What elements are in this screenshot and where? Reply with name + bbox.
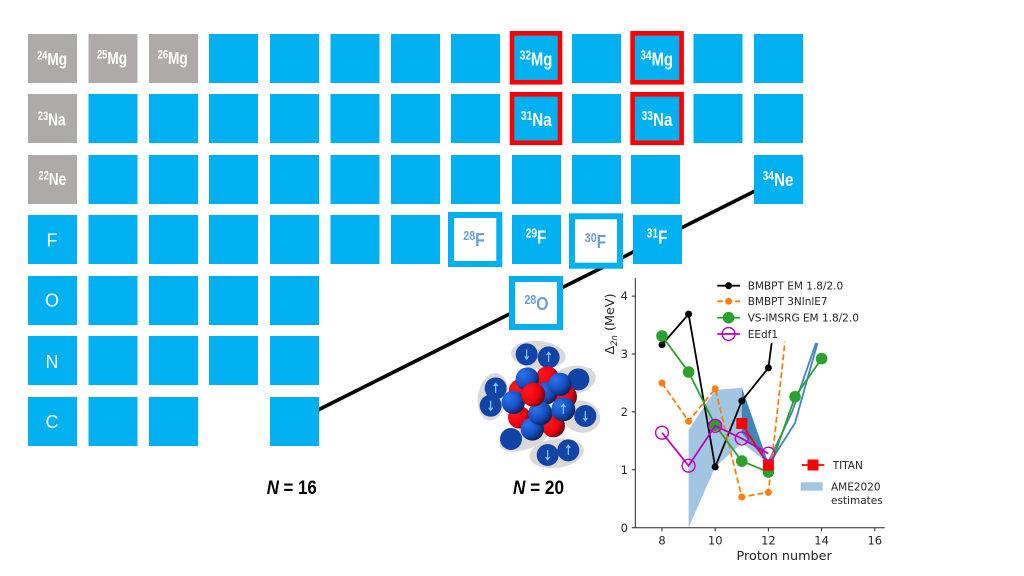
series: BMBPT EM 1.8/2.0 — [658, 311, 772, 470]
label: 28F — [463, 229, 485, 250]
label: 29F: F — [537, 227, 546, 248]
label: 24Mg — [37, 49, 67, 69]
legend: TITAN: TITAN — [832, 460, 863, 472]
x tick labels: 10 — [708, 534, 723, 548]
y tick labels: 1 — [621, 463, 628, 477]
label: 26Mg — [158, 48, 188, 68]
label: 32Mg — [520, 49, 552, 70]
label: 23Na: 23 — [38, 110, 48, 124]
label: 28O: 28 — [524, 293, 537, 307]
legend: TITAN — [802, 460, 863, 472]
row: neon isotopes — [28, 155, 803, 204]
legend: model series: VS-IMSRG EM 1.8/2.0 — [748, 312, 859, 324]
label: C: C — [46, 412, 58, 432]
x axis title: Proton number — [737, 549, 833, 564]
label: 30F — [585, 231, 606, 252]
label: 31Na — [521, 110, 552, 130]
label: 29F — [526, 227, 546, 248]
row: magnesium isotopes — [28, 34, 803, 83]
label: 34Ne: 34 — [763, 170, 775, 183]
label: 30F: 30 — [585, 231, 597, 245]
label: 34Mg: 34 — [640, 50, 652, 63]
label: 28F: F — [475, 229, 485, 250]
y axis title: 2n — [610, 335, 620, 346]
label: O: O — [45, 291, 59, 311]
label: 33Na: Na — [653, 110, 673, 130]
red highlighted isotope cells — [512, 33, 682, 143]
x tick labels — [658, 534, 882, 548]
legend: AME2020 estimates — [801, 481, 883, 507]
row: oxygen isotopes — [28, 276, 319, 325]
label: 23Na — [38, 110, 66, 130]
label: N: N — [46, 352, 58, 372]
legend: model series — [717, 280, 859, 341]
axes — [632, 278, 885, 531]
legend: model series: EEdf1 — [748, 329, 778, 341]
x tick labels: 14 — [814, 534, 829, 548]
label: 32Mg: Mg — [531, 49, 552, 70]
label: 26Mg: Mg — [168, 50, 188, 68]
y axis title: Δ — [603, 346, 618, 355]
legend: model series: BMBPT EM 1.8/2.0 — [748, 280, 843, 292]
y tick labels: 2 — [621, 405, 628, 419]
series: TITAN — [736, 418, 774, 471]
label: 34Ne: Ne — [774, 170, 793, 190]
label: 31F: F — [658, 227, 667, 248]
label: 33Na: 33 — [642, 110, 653, 123]
x tick labels: 8 — [658, 534, 666, 548]
label: 25Mg: Mg — [107, 50, 127, 68]
label: F: F — [46, 230, 58, 250]
x tick labels: 16 — [867, 534, 882, 548]
AME2020 estimate band — [689, 343, 818, 528]
blue outlined isotope cells — [451, 215, 620, 327]
label: 32Mg: 32 — [520, 50, 531, 63]
icon: neutron-rich nucleus with halo pairs — [474, 339, 604, 472]
label: 31Na: 31 — [521, 110, 533, 123]
label: 29F: 29 — [526, 228, 537, 241]
label: 34Ne — [763, 170, 793, 190]
label: 31F: 31 — [647, 228, 659, 241]
label: 28F: 28 — [463, 229, 476, 243]
label: 31F — [647, 227, 667, 248]
label: 22Ne: 22 — [38, 169, 49, 183]
series: VS-IMSRG EM 1.8/2.0 — [656, 330, 827, 478]
legend: AME2020 estimates: estimates — [831, 495, 883, 507]
label: 33Na — [642, 110, 673, 130]
label: 24Mg: 24 — [37, 49, 47, 63]
N = 20 diagonal line — [316, 190, 756, 411]
label: 28O — [524, 293, 549, 314]
label: 25Mg: 25 — [97, 48, 107, 62]
label: 28O: O — [536, 293, 549, 314]
label: N = 20: N = 20 — [513, 478, 564, 499]
chart: two-neutron gap vs proton number — [603, 278, 885, 564]
y tick labels: 3 — [621, 347, 628, 361]
series: BMBPT 3NlnlE7 — [658, 342, 785, 500]
y tick labels: 4 — [621, 289, 628, 303]
label: 25Mg — [97, 48, 127, 68]
label: 26Mg: 26 — [158, 48, 168, 62]
x tick labels: 12 — [761, 534, 776, 548]
label: 22Ne — [38, 169, 66, 189]
row: sodium isotopes — [28, 94, 803, 143]
label: 34Mg — [640, 49, 673, 70]
label: N = 16: N = 16 — [267, 478, 317, 499]
series: EEdf1 — [656, 419, 775, 472]
label: 22Ne: Ne — [49, 171, 66, 189]
label: 31Na: Na — [532, 110, 552, 130]
row: nitrogen isotopes — [28, 336, 319, 385]
legend: model series: BMBPT 3NlnlE7 — [748, 296, 828, 308]
label: 30F: F — [597, 231, 606, 252]
y axis title: (MeV) — [603, 293, 618, 335]
label: 23Na: Na — [48, 111, 66, 130]
label: 24Mg: Mg — [47, 51, 67, 69]
row: fluorine isotopes — [28, 215, 682, 264]
y tick labels: 0 — [621, 521, 628, 535]
label: 34Mg: Mg — [652, 49, 673, 70]
y tick labels — [621, 289, 628, 535]
row: carbon isotopes — [28, 397, 319, 446]
legend: AME2020 estimates: AME2020 — [831, 481, 881, 493]
